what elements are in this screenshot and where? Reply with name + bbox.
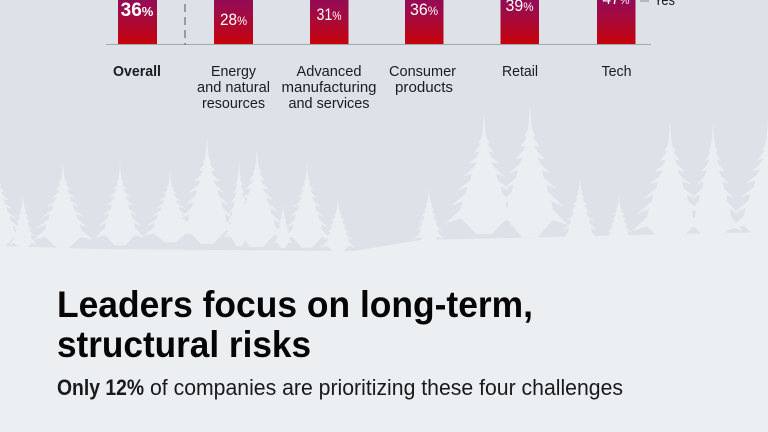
label: Advanced manufacturing and services (282, 63, 376, 112)
subtitle: Only 12% (57, 375, 144, 400)
label: Consumer products (389, 63, 456, 96)
label: Energy and natural resources (197, 63, 270, 112)
label: Advanced manufacturing and services: manufacturing (282, 79, 376, 96)
label: Consumer products: Consumer (389, 63, 456, 80)
bar: Consumer products 36%: 36% (410, 1, 438, 19)
bar: Advanced manufacturing and services 31%: 31% (316, 6, 342, 24)
label: Advanced manufacturing and services: Advanced (296, 63, 362, 80)
title (57, 284, 533, 365)
label: Energy and natural resources: and natural (197, 79, 270, 96)
axis line (106, 44, 651, 45)
snowy ground and tree line (0, 103, 768, 432)
bar: Overall 36% (118, 0, 157, 45)
category labels (113, 63, 632, 112)
title: Leaders focus on long-term, (57, 284, 533, 325)
legend: Yes (640, 0, 675, 9)
bar: Energy and natural resources 28% (214, 0, 253, 45)
bar: Energy and natural resources 28%: 28% (220, 11, 247, 29)
label: Energy and natural resources: Energy (211, 63, 256, 80)
label: Advanced manufacturing and services: and services (288, 95, 370, 112)
bar: Retail 39% (500, 0, 539, 45)
bar: Advanced manufacturing and services 31% (310, 0, 348, 45)
bar chart (106, 0, 651, 45)
title: structural risks (57, 324, 311, 365)
label: Energy and natural resources: resources (202, 95, 265, 112)
bar: Consumer products 36% (405, 0, 444, 45)
label: Tech: Tech (602, 63, 632, 80)
bar: Tech 47% (597, 0, 636, 45)
label: Consumer products: products (395, 79, 453, 96)
subtitle: of companies are prioritizing these four challenges (150, 375, 623, 400)
label: Retail: Retail (502, 63, 538, 80)
bar: Overall 36%: 36% (121, 0, 154, 21)
label: Overall: Overall (113, 63, 161, 80)
dashed separator (184, 4, 186, 45)
